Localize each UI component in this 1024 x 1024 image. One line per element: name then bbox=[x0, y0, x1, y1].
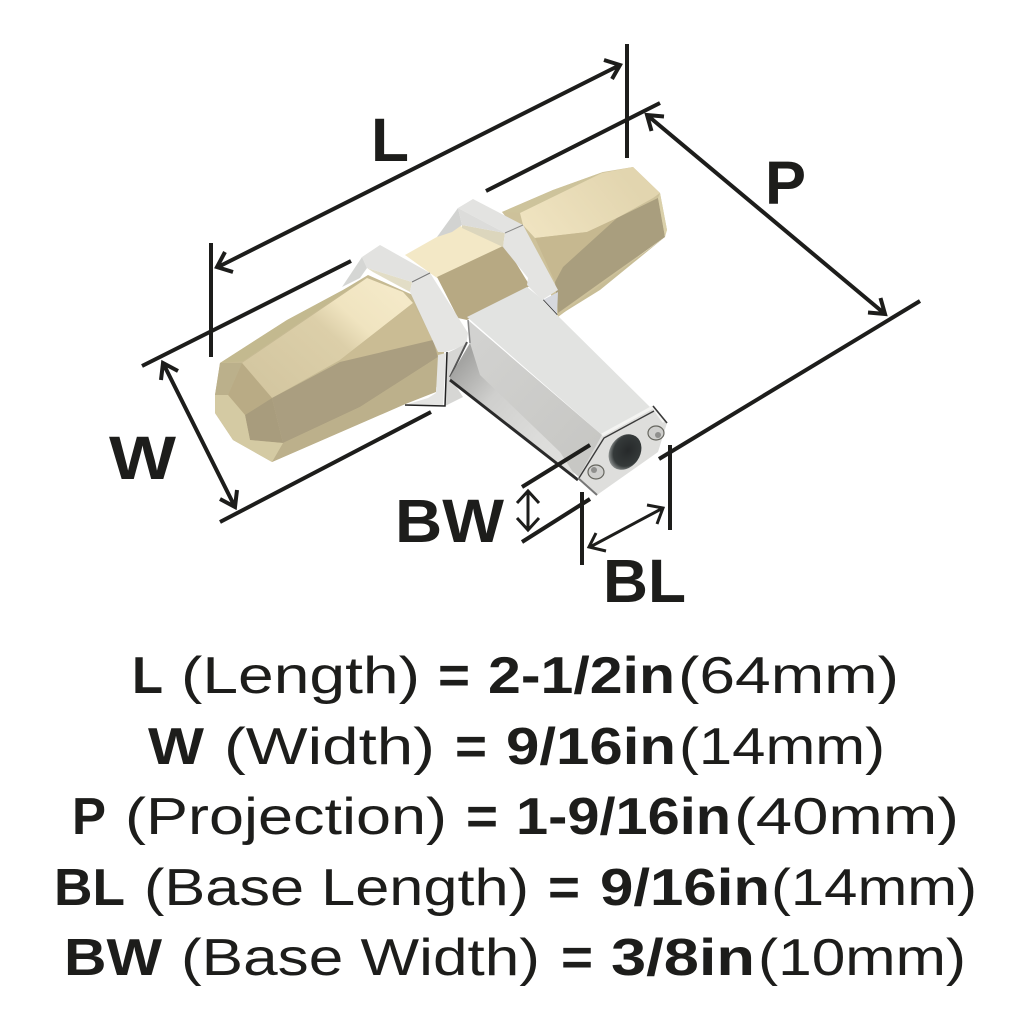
BL arrow bbox=[589, 505, 663, 551]
row: projection: = bbox=[466, 788, 498, 846]
P extension line bbox=[659, 301, 920, 459]
label P: P bbox=[765, 149, 806, 217]
row: width: 9/16in bbox=[506, 718, 676, 776]
row: length: 2-1/2in bbox=[488, 647, 675, 705]
row: projection bbox=[72, 788, 959, 846]
row: base length: (14mm) bbox=[771, 859, 977, 917]
row: base length: 9/16in bbox=[600, 859, 770, 917]
BW arrow bbox=[517, 491, 539, 530]
row: width: W bbox=[148, 718, 205, 776]
row: length: (Length) bbox=[181, 647, 420, 705]
L dimension arrow bbox=[217, 60, 620, 272]
left chrome collar bbox=[342, 245, 468, 406]
row: base length: BL bbox=[54, 859, 125, 917]
row: base width: (Base Width) bbox=[181, 929, 540, 987]
row: base width: 3/8in bbox=[611, 929, 755, 987]
row: base length bbox=[54, 859, 977, 917]
icon: screw right bbox=[648, 426, 664, 440]
specification list bbox=[54, 647, 977, 987]
chrome stem bbox=[450, 287, 650, 480]
row: base width: (10mm) bbox=[758, 929, 966, 987]
row: width: (Width) bbox=[224, 718, 435, 776]
row: projection: (Projection) bbox=[125, 788, 447, 846]
W lower extension line bbox=[220, 412, 431, 522]
label W: W bbox=[109, 424, 176, 492]
row: width: = bbox=[455, 718, 487, 776]
dimension lines and arrows bbox=[142, 44, 920, 565]
base plate with hole and screws bbox=[578, 406, 667, 495]
P dimension arrow bbox=[647, 115, 885, 314]
label L: L bbox=[371, 106, 409, 174]
knob product illustration bbox=[215, 167, 667, 495]
row: length: = bbox=[438, 647, 470, 705]
L extension lines bbox=[142, 44, 660, 366]
icon: screw left bbox=[588, 465, 604, 479]
row: base length: = bbox=[548, 859, 580, 917]
row: base width: BW bbox=[64, 929, 163, 987]
row: width: (14mm) bbox=[679, 718, 885, 776]
row: base length: (Base Length) bbox=[144, 859, 529, 917]
row: projection: (40mm) bbox=[734, 788, 959, 846]
row: length: (64mm) bbox=[678, 647, 899, 705]
label BL: BL bbox=[603, 547, 686, 615]
W dimension arrow bbox=[161, 363, 237, 507]
BW extension lines bbox=[522, 445, 590, 542]
label BW: BW bbox=[395, 487, 504, 555]
row: projection: P bbox=[72, 788, 106, 846]
right chrome collar bbox=[437, 199, 558, 315]
row: length bbox=[132, 647, 899, 705]
BL extension lines bbox=[582, 445, 670, 565]
left brass end bbox=[215, 275, 445, 462]
icon: threaded hole bbox=[602, 428, 648, 476]
centre brass bar bbox=[405, 225, 530, 320]
row: length: L bbox=[132, 647, 163, 705]
right brass end bbox=[502, 167, 667, 317]
row: base width: = bbox=[561, 929, 593, 987]
dimension labels bbox=[109, 106, 806, 615]
row: projection: 1-9/16in bbox=[516, 788, 731, 846]
row: width bbox=[148, 718, 885, 776]
row: base width bbox=[64, 929, 966, 987]
